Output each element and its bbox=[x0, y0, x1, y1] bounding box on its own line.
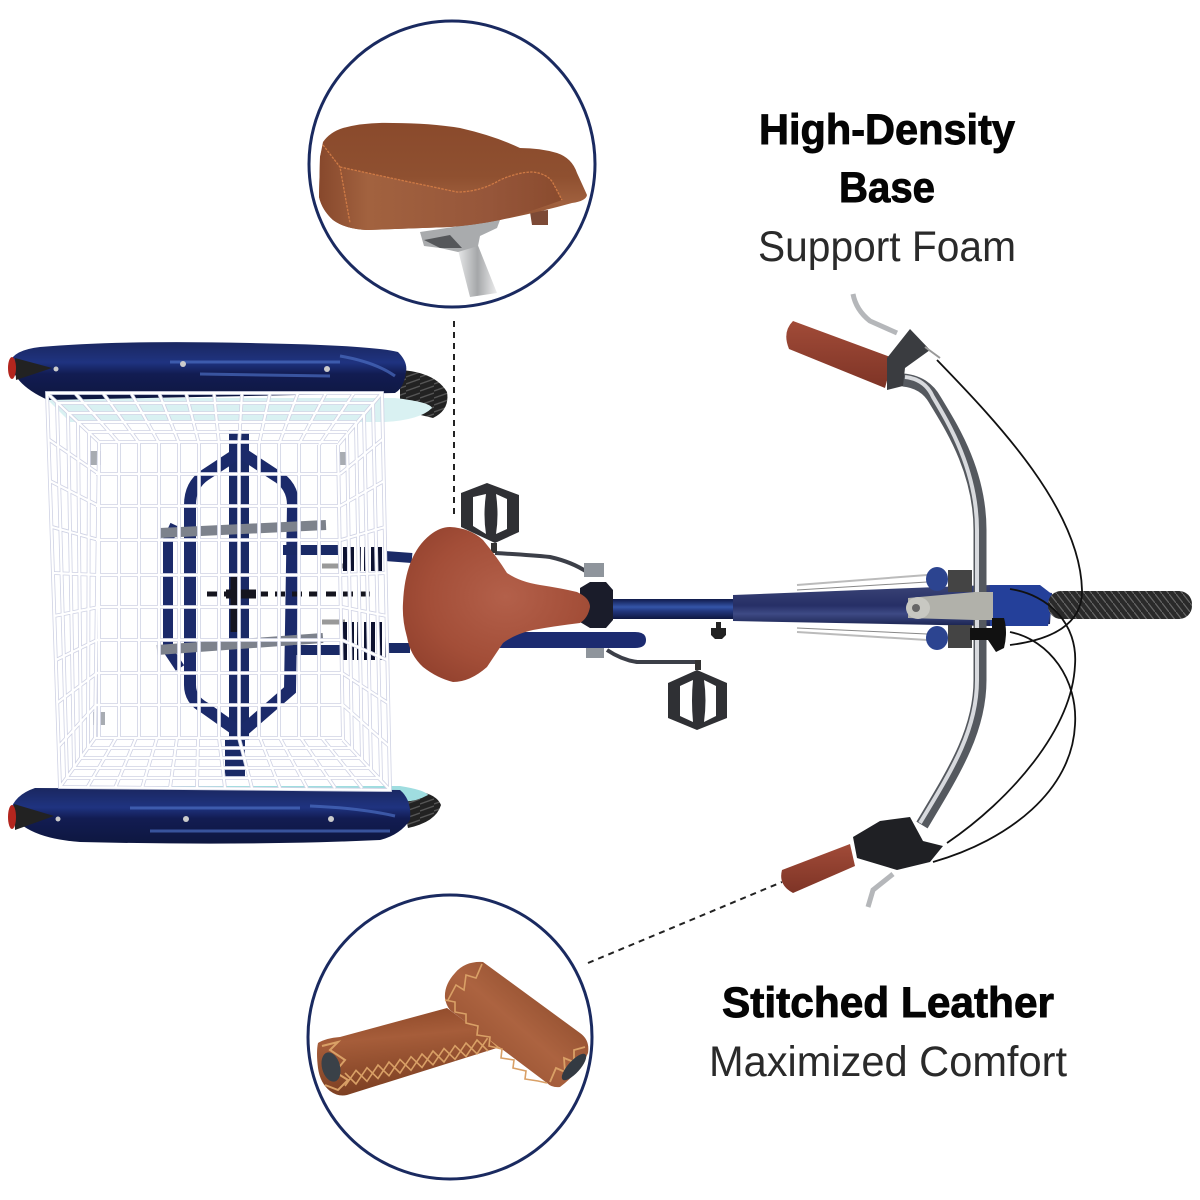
handlebar bbox=[903, 377, 980, 825]
frame under basket bbox=[157, 430, 412, 778]
bottom bracket bbox=[490, 543, 701, 670]
rear fender bottom bbox=[8, 788, 410, 844]
heading: stitched leather: Maximized Comfort bbox=[709, 1038, 1067, 1086]
cables bbox=[933, 360, 1082, 862]
cranks bbox=[495, 553, 697, 662]
cable clip bbox=[970, 618, 1006, 652]
bottom grip bbox=[781, 844, 855, 893]
teal wheel plates bbox=[46, 398, 432, 802]
callout: saddle close-up bbox=[309, 21, 595, 307]
fork stays and brake bbox=[711, 567, 972, 650]
dense frame behind side wall bbox=[340, 547, 386, 660]
rear tires bbox=[400, 370, 447, 828]
basket brackets bbox=[90, 451, 348, 725]
dashed connector: grip bbox=[588, 882, 782, 963]
heading: high-density base: Support Foam bbox=[758, 223, 1016, 271]
heading: high-density base: Base bbox=[839, 164, 935, 212]
main tube bbox=[590, 585, 1053, 626]
heading: high-density base: High-Density bbox=[759, 106, 1015, 154]
heading: stitched leather bbox=[709, 979, 1067, 1086]
heading: high-density base bbox=[758, 106, 1016, 271]
wire basket bbox=[47, 393, 390, 790]
saddle bbox=[403, 527, 590, 682]
top grip bbox=[786, 321, 893, 388]
trike illustration bbox=[8, 294, 1192, 907]
rear fender top bbox=[8, 342, 406, 400]
pedals bbox=[461, 483, 727, 730]
bottom shifter bbox=[853, 817, 943, 907]
heading: stitched leather: Stitched Leather bbox=[722, 979, 1054, 1027]
callout: leather grips close-up bbox=[308, 895, 592, 1179]
front tire bbox=[1048, 591, 1192, 619]
top brake lever bbox=[853, 294, 940, 390]
dashed connector: saddle bbox=[453, 321, 455, 515]
stem bbox=[906, 592, 993, 620]
